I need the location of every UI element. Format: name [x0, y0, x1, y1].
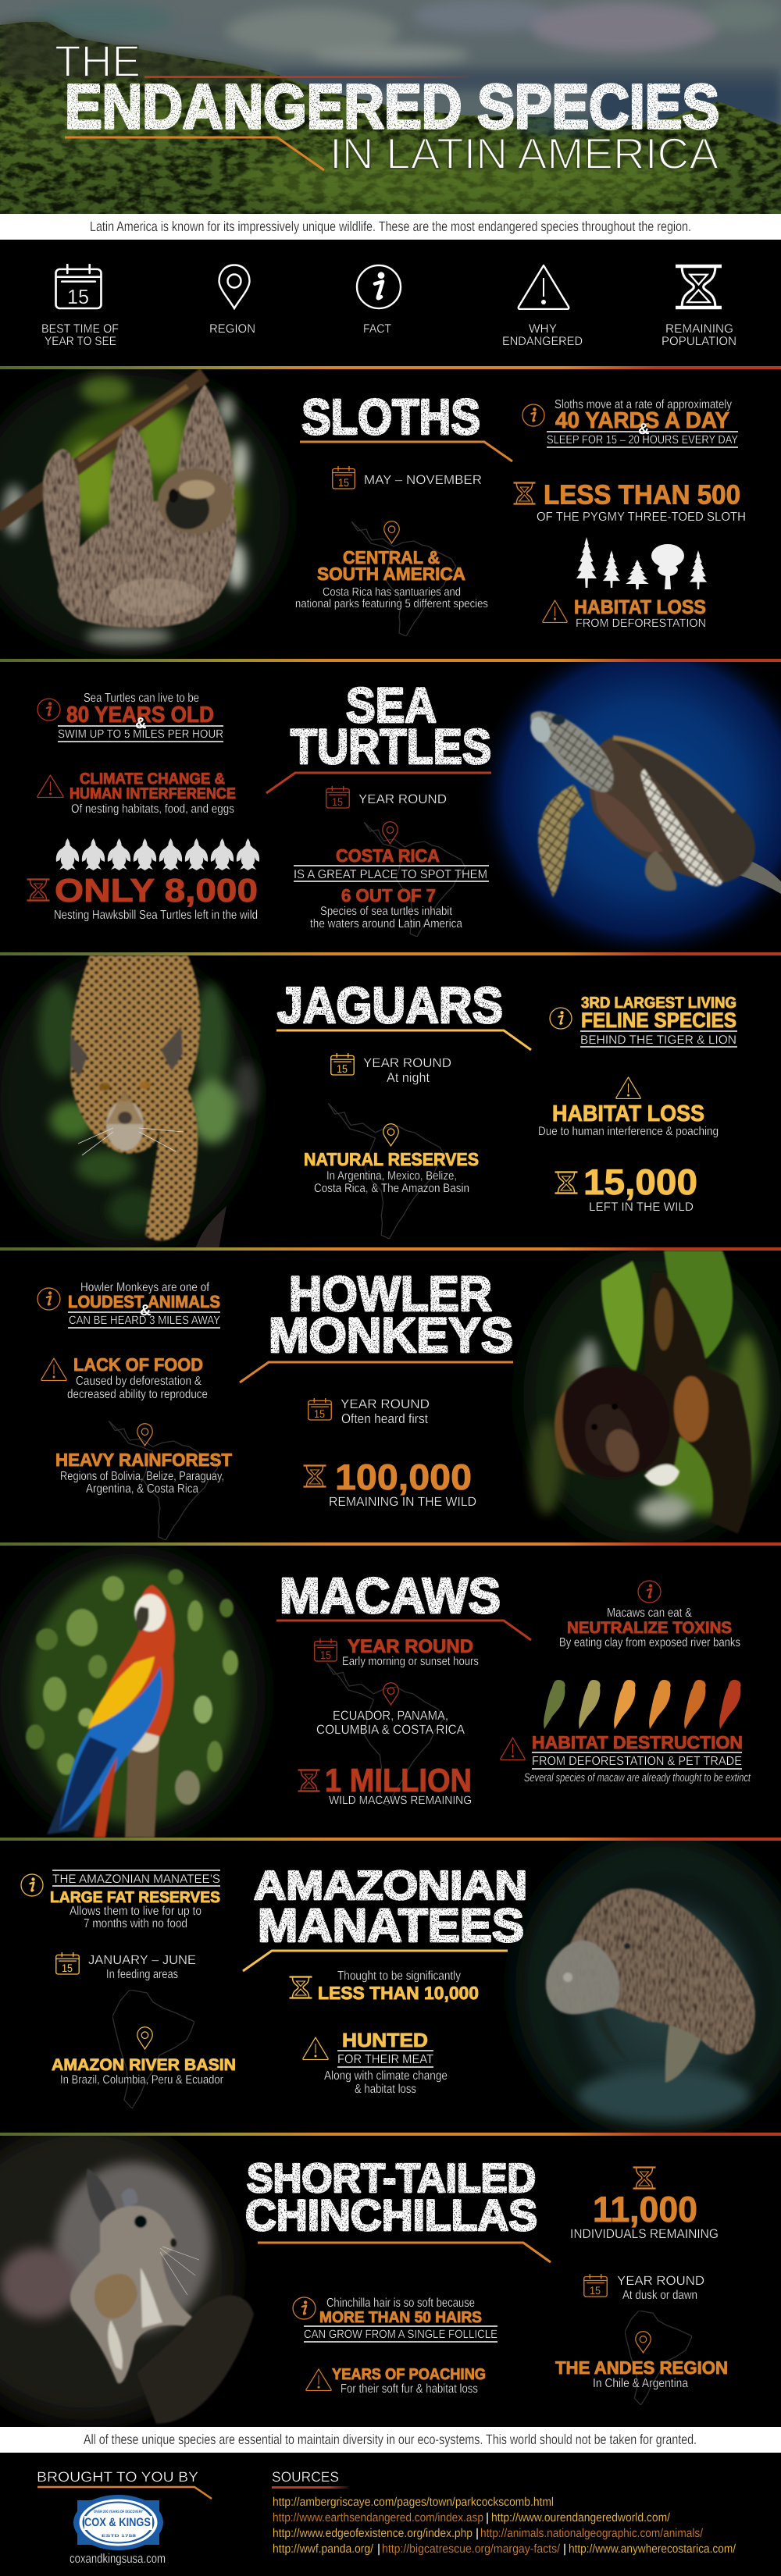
- population: WILD MACAWS REMAINING: [329, 1794, 472, 1807]
- icon: pin: [137, 1424, 152, 1446]
- heading: JAGUARS: [277, 977, 503, 1034]
- best time: MAY – NOVEMBER: [364, 473, 482, 487]
- heading: SLOTHS: [301, 389, 480, 445]
- icon: warning: [306, 2369, 331, 2391]
- logo: Cox and Kings badge: OVER 200 YEARS OF DISCOVERY: [94, 2510, 144, 2514]
- fact: THE AMAZONIAN MANATEE'S: [52, 1873, 220, 1886]
- region: ECUADOR, PANAMA,: [333, 1709, 448, 1723]
- fact: [293, 2297, 497, 2342]
- region: [304, 1124, 479, 1195]
- icon row: eight turtles: [56, 838, 259, 870]
- threat: Along with climate change: [324, 2069, 448, 2083]
- panel: macaws: [0, 1546, 781, 1842]
- photo: scarlet macaw: [0, 1546, 266, 1842]
- header photo: mountains and sea: [0, 0, 781, 215]
- photo: jaguar: [0, 952, 259, 1249]
- threat: HABITAT LOSS: [574, 596, 706, 618]
- icon: calendar: [56, 1952, 79, 1974]
- footer: sources: |: [486, 2511, 489, 2524]
- legend panel: [0, 240, 781, 367]
- footer: sources: http://www.edgeofexistence.org/index.php: [273, 2527, 473, 2540]
- best time: [56, 1952, 196, 1981]
- legend: remaining population: [662, 266, 736, 348]
- icon: hourglass: [27, 879, 50, 901]
- fact: Sea Turtles can live to be: [84, 692, 199, 705]
- panel: amazonian manatees: [0, 1834, 781, 2139]
- map of the Americas: [326, 1663, 444, 1806]
- map of the Americas: [364, 822, 465, 937]
- population: 15,000: [583, 1162, 697, 1202]
- heading: [269, 1267, 513, 1363]
- icon: info: [293, 2297, 316, 2319]
- gradient divider: [0, 659, 781, 662]
- heading: SEA: [346, 678, 437, 733]
- threat: HABITAT DESTRUCTION: [532, 1732, 743, 1752]
- fact: [559, 1581, 740, 1649]
- photo: howler monkey: [523, 1249, 781, 1546]
- fact: FELINE SPECIES: [581, 1009, 736, 1032]
- icon: calendar: 15: [590, 2284, 601, 2297]
- best time: In feeding areas: [106, 1968, 178, 1981]
- region: In Brazil, Columbia, Peru & Ecuador: [60, 2073, 223, 2087]
- best time: [326, 786, 447, 808]
- title accent line: [144, 76, 469, 78]
- threat: HABITAT LOSS: [552, 1101, 704, 1126]
- icon: hourglass: [513, 482, 536, 504]
- icon: calendar: [315, 1639, 337, 1661]
- footer: sources: SOURCES: [272, 2469, 339, 2485]
- logo: Cox and Kings badge: COX & KINGS: [84, 2516, 151, 2529]
- icon: warning: [303, 2037, 328, 2059]
- region: IS A GREAT PLACE TO SPOT THEM: [294, 868, 487, 881]
- logo: Cox and Kings badge: [73, 2495, 163, 2550]
- threat: FOR THEIR MEAT: [337, 2053, 433, 2066]
- population: 1 MILLION: [325, 1762, 472, 1799]
- footer: sources: http://ambergriscaye.com/pages/town/parkcockscomb.html: [273, 2496, 554, 2509]
- region: In Argentina, Mexico, Belize,: [326, 1169, 457, 1183]
- region: national parks featuring 5 different species: [295, 597, 488, 610]
- region: HEAVY RAINFOREST: [55, 1450, 232, 1470]
- fact: SWIM UP TO 5 MILES PER HOUR: [58, 728, 223, 741]
- region: Costa Rica has santuaries and: [323, 585, 461, 599]
- population: [303, 1457, 476, 1509]
- fact: [21, 1870, 220, 1930]
- fact: 3RD LARGEST LIVING: [581, 994, 736, 1012]
- threat: FROM DEFORESTATION: [576, 617, 706, 630]
- icon: hourglass: [303, 1466, 326, 1486]
- threat: HUNTED: [342, 2030, 428, 2051]
- heading: SHORT-TAILED: [247, 2156, 536, 2201]
- threat: [543, 596, 706, 630]
- heading: MANATEES: [258, 1899, 524, 1952]
- footer: sources: http://www.ourendangeredworld.com/: [491, 2511, 671, 2524]
- population: [27, 872, 258, 922]
- best time: At night: [387, 1070, 430, 1085]
- heading: HOWLER: [289, 1267, 492, 1322]
- threat: Caused by deforestation &: [76, 1375, 201, 1388]
- fact: Chinchilla hair is so soft because: [326, 2297, 475, 2310]
- photo: chinchilla: [0, 2123, 254, 2424]
- title: in latin america: IN LATIN AMERICA: [330, 129, 719, 178]
- fact: MORE THAN 50 HAIRS: [319, 2309, 482, 2326]
- icon: info: [37, 1288, 60, 1310]
- panel: short-tailed chinchillas: [0, 2136, 727, 2427]
- region: COLUMBIA & COSTA RICA: [316, 1723, 465, 1737]
- heading: MACAWS: [280, 1567, 501, 1624]
- gradient divider: [0, 2133, 781, 2136]
- region: CENTRAL &: [343, 547, 440, 568]
- region: Species of sea turtles inhabit: [320, 905, 453, 918]
- footer: sources: http://bigcatrescue.org/margay-facts/: [382, 2542, 561, 2556]
- icon: calendar: 15: [338, 476, 349, 489]
- fact: &: [140, 1302, 151, 1319]
- icon: info: [550, 1008, 572, 1029]
- population: [289, 1969, 479, 2003]
- threat: [538, 1077, 719, 1138]
- legend: fact: FACT: [363, 322, 391, 336]
- best time: YEAR ROUND: [363, 1056, 451, 1070]
- photo: sea turtle: [483, 662, 781, 952]
- fact: [550, 994, 737, 1047]
- population: OF THE PYGMY THREE-TOED SLOTH: [537, 511, 746, 524]
- region: Argentina, & Costa Rica: [86, 1482, 198, 1496]
- region: 6 OUT OF 7: [341, 885, 436, 906]
- region: AMAZON RIVER BASIN: [52, 2056, 236, 2074]
- threat: CLIMATE CHANGE &: [80, 770, 225, 788]
- panel: howler monkeys: [0, 1249, 781, 1546]
- threat: & habitat loss: [355, 2083, 416, 2096]
- best time: YEAR ROUND: [617, 2274, 704, 2288]
- fact: &: [135, 715, 146, 732]
- heading underline: [276, 1030, 531, 1050]
- best time: JANUARY – JUNE: [88, 1953, 196, 1967]
- gradient divider: [0, 1838, 781, 1841]
- population: 100,000: [335, 1457, 472, 1497]
- legend: why endangered: ENDANGERED: [502, 335, 583, 348]
- gradient divider: [0, 952, 781, 955]
- region: the waters around Latin America: [310, 917, 462, 930]
- heading: [245, 2156, 537, 2240]
- region: [52, 2027, 236, 2087]
- region: [316, 1683, 465, 1737]
- fact: Howler Monkeys are one of: [80, 1281, 209, 1294]
- icon: warning: [543, 600, 567, 622]
- legend: why endangered: [502, 265, 583, 348]
- fact: CAN GROW FROM A SINGLE FOLLICLE: [304, 2328, 497, 2341]
- icon: hourglass: [555, 1172, 578, 1193]
- gradient divider: [0, 1247, 781, 1251]
- threat: [501, 1732, 751, 1784]
- threat: Due to human interference & poaching: [538, 1125, 719, 1138]
- fact: SLEEP FOR 15 – 20 HOURS EVERY DAY: [547, 433, 738, 447]
- icon: pin: [384, 521, 399, 543]
- icon: calendar: [584, 2275, 607, 2297]
- threat: HUMAN INTERFERENCE: [70, 785, 236, 802]
- population: [298, 1762, 472, 1807]
- icon: calendar: 15: [332, 795, 343, 808]
- heading underline: [276, 1621, 531, 1640]
- icon: pin: [137, 2027, 152, 2049]
- heading: CHINCHILLAS: [245, 2190, 537, 2240]
- best time: [333, 467, 482, 489]
- legend: best time of year: 15: [67, 285, 89, 308]
- icon: info: [638, 1581, 661, 1603]
- best time: [308, 1397, 430, 1426]
- heading underline: [243, 1951, 508, 1971]
- threat: Of nesting habitats, food, and eggs: [71, 802, 234, 816]
- threat: [306, 2366, 486, 2396]
- population: [513, 479, 746, 524]
- threat: FROM DEFORESTATION & PET TRADE: [532, 1755, 742, 1768]
- footer: sources: http://www.anywherecostarica.com/: [569, 2542, 736, 2556]
- map of the Americas: [351, 521, 456, 636]
- sponsor url: coxandkingsusa.com: [70, 2552, 166, 2566]
- footer: sources: http://wwf.panda.org/: [273, 2542, 374, 2556]
- footer: sources: http://animals.nationalgeographic.com/animals/: [480, 2527, 704, 2540]
- threat: LACK OF FOOD: [73, 1354, 203, 1375]
- map of the Americas: [109, 1421, 218, 1540]
- region: SOUTH AMERICA: [317, 564, 465, 584]
- fact: 7 months with no food: [84, 1917, 187, 1930]
- intro band: [0, 214, 781, 240]
- icon: calendar: [331, 1053, 354, 1075]
- map of South America: [625, 2311, 692, 2405]
- fact: [37, 1281, 220, 1328]
- map of the Americas: [328, 1103, 445, 1239]
- heading underline: [240, 1362, 513, 1382]
- icon: calendar: [333, 467, 355, 489]
- icon: hourglass: [298, 1770, 320, 1791]
- population: LESS THAN 10,000: [318, 1983, 479, 2003]
- icon: hourglass: [633, 2167, 656, 2189]
- panel: sea turtles: [27, 662, 781, 952]
- legend: fact: [357, 265, 401, 336]
- logo: Cox and Kings badge: ESTD 1758: [102, 2534, 136, 2539]
- footer: sponsor: [37, 2469, 212, 2566]
- region: [294, 822, 489, 930]
- heading: MONKEYS: [269, 1308, 513, 1363]
- fact: Macaws can eat &: [607, 1606, 692, 1620]
- region: [55, 1424, 232, 1496]
- region: Regions of Bolivia, Belize, Paraguay,: [60, 1470, 224, 1483]
- footer: sources: |: [377, 2542, 380, 2556]
- title: endangered species: ENDANGERED SPECIES: [65, 72, 719, 141]
- legend: remaining population: POPULATION: [662, 335, 736, 348]
- icon: info: [522, 404, 544, 426]
- icon row: six macaws: [544, 1680, 741, 1729]
- heading underline: [258, 2243, 551, 2262]
- panel: sloths: [0, 367, 781, 659]
- fact: [37, 692, 223, 742]
- icon: hourglass: [289, 1976, 312, 1998]
- icon: info: [37, 699, 60, 720]
- threat: [303, 2030, 448, 2096]
- fact: By eating clay from exposed river banks: [559, 1636, 740, 1649]
- closing band: [0, 2427, 781, 2453]
- photo: manatee: [515, 1834, 781, 2139]
- legend: region: REGION: [209, 322, 255, 336]
- threat: For their soft fur & habitat loss: [341, 2382, 478, 2396]
- population: Thought to be significantly: [337, 1969, 461, 1983]
- fact: LOUDEST ANIMALS: [68, 1292, 220, 1311]
- footer: sources: |: [476, 2527, 479, 2540]
- best time: At dusk or dawn: [622, 2289, 697, 2302]
- legend: best time of year: BEST TIME OF: [41, 322, 119, 336]
- region: Costa Rica, & The Amazon Basin: [314, 1182, 469, 1195]
- threat: decreased ability to reproduce: [67, 1388, 208, 1401]
- population: INDIVIDUALS REMAINING: [570, 2227, 719, 2241]
- icon: warning: [41, 1358, 66, 1380]
- population: [570, 2167, 719, 2241]
- icon: pin: [636, 2332, 651, 2353]
- fact: Allows them to live for up to: [70, 1905, 201, 1918]
- fact: &: [638, 421, 649, 438]
- photo: sloth hanging from a branch: [0, 367, 289, 656]
- fact: NEUTRALIZE TOXINS: [567, 1619, 732, 1637]
- icon: pin: [383, 822, 398, 844]
- header panel: [0, 0, 781, 215]
- population: LEFT IN THE WILD: [589, 1201, 694, 1214]
- fact: Sloths move at a rate of approximately: [555, 398, 732, 411]
- icon: trees: [576, 537, 707, 589]
- fact: [522, 398, 738, 447]
- fact: CAN BE HEARD 3 MILES AWAY: [69, 1314, 220, 1327]
- icon: calendar: 15: [314, 1407, 325, 1420]
- panel: jaguars: [0, 952, 781, 1249]
- heading underline: [266, 773, 491, 793]
- icon: pin: [383, 1124, 398, 1146]
- heading: TURTLES: [291, 720, 491, 774]
- heading: AMAZONIAN: [254, 1863, 527, 1909]
- threat: [37, 770, 236, 816]
- region: [295, 521, 488, 610]
- title: the: THE: [55, 37, 141, 87]
- legend: best time of year: [41, 265, 119, 348]
- population: 11,000: [593, 2189, 697, 2229]
- map of South America: [112, 1990, 194, 2108]
- population: [555, 1162, 697, 1214]
- legend: remaining population: REMAINING: [665, 322, 733, 336]
- icon: info: [21, 1874, 43, 1896]
- region: COSTA RICA: [336, 845, 440, 866]
- best time: [331, 1053, 451, 1085]
- heading: [254, 1863, 527, 1952]
- legend: region: [209, 265, 255, 336]
- footer: sources: |: [563, 2542, 566, 2556]
- icon: warning: [501, 1738, 525, 1759]
- population: ONLY 8,000: [55, 872, 258, 909]
- region: THE ANDES REGION: [555, 2357, 728, 2378]
- icon: calendar: 15: [337, 1062, 348, 1075]
- icon: calendar: 15: [62, 1962, 73, 1974]
- region: In Chile & Argentina: [593, 2377, 688, 2390]
- region: NATURAL RESERVES: [304, 1149, 479, 1169]
- best time: YEAR ROUND: [348, 1636, 473, 1657]
- threat: YEARS OF POACHING: [332, 2366, 486, 2383]
- population: REMAINING IN THE WILD: [329, 1495, 476, 1509]
- population: Nesting Hawksbill Sea Turtles left in the wild: [54, 909, 258, 922]
- best time: [315, 1636, 479, 1668]
- threat: [41, 1354, 208, 1401]
- icon: warning: [616, 1077, 640, 1099]
- population: LESS THAN 500: [544, 479, 740, 511]
- heading: [291, 678, 491, 774]
- fact: LARGE FAT RESERVES: [50, 1889, 220, 1906]
- fact: BEHIND THE TIGER & LION: [580, 1034, 736, 1047]
- footer: sources: http://www.earthsendangered.com/index.asp: [273, 2511, 483, 2524]
- legend: best time of year: YEAR TO SEE: [45, 335, 116, 348]
- best time: YEAR ROUND: [341, 1397, 430, 1411]
- icon: calendar: [308, 1398, 331, 1420]
- region: [555, 2332, 728, 2390]
- best time: Often heard first: [341, 1411, 428, 1426]
- footer: sponsor: BROUGHT TO YOU BY: [37, 2469, 198, 2485]
- best time: [584, 2274, 704, 2302]
- heading underline: [300, 442, 512, 461]
- best time: Early morning or sunset hours: [342, 1655, 479, 1668]
- icon: calendar: 15: [320, 1649, 331, 1661]
- icon: pin: [383, 1683, 398, 1705]
- best time: YEAR ROUND: [358, 792, 447, 806]
- icon: calendar: [326, 786, 349, 808]
- gradient divider: [0, 366, 781, 369]
- gradient divider: [0, 1542, 781, 1546]
- fact: 40 YARDS A DAY: [555, 408, 729, 433]
- footer: sources: [272, 2469, 736, 2556]
- fact: 80 YEARS OLD: [66, 703, 214, 728]
- icon: warning: [37, 775, 63, 797]
- title underline arrow: [65, 137, 324, 170]
- legend: why endangered: WHY: [529, 322, 557, 336]
